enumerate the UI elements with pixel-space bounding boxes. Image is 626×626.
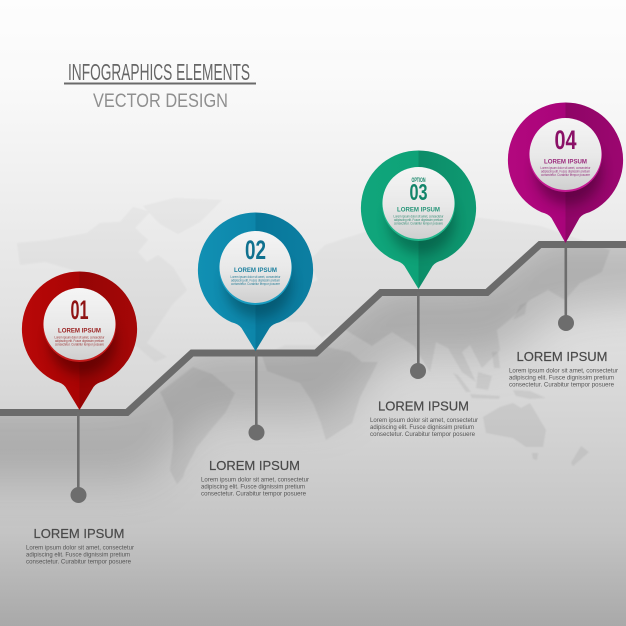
pin 04: LOREM IPSUM xyxy=(544,158,587,166)
stem and dot 02 xyxy=(248,352,264,440)
text block 03: LOREM IPSUM xyxy=(378,398,469,414)
subtitle: VECTOR DESIGN xyxy=(93,91,228,112)
pin 02: adipiscing elit. Fusce dignissim pretium xyxy=(231,278,280,282)
pin 01 xyxy=(22,271,137,410)
shadow under the rising line xyxy=(0,231,626,480)
text block 01: LOREM IPSUM xyxy=(34,526,124,541)
text block 03: consectetur. Curabitur tempor posuere xyxy=(370,431,475,438)
pin 04: 04 xyxy=(554,125,576,155)
pin 04: consectetur. Curabitur tempor posuere xyxy=(541,173,590,177)
pin 03: consectetur. Curabitur tempor posuere xyxy=(394,221,443,225)
text block 01: adipiscing elit. Fusce dignissim pretium xyxy=(26,552,130,558)
text block 02: LOREM IPSUM xyxy=(209,458,300,473)
title xyxy=(64,59,256,112)
pin 01: LOREM IPSUM xyxy=(58,328,101,334)
stem and dot 04 xyxy=(558,244,574,331)
pin 04: Lorem ipsum dolor sit amet, consectetur xyxy=(540,166,591,170)
text block 04: consectetur. Curabitur tempor posuere xyxy=(509,382,614,388)
pin 01: consectetur. Curabitur tempor posuere xyxy=(55,342,104,346)
pin 03: 03 xyxy=(410,179,428,205)
pin 02: LOREM IPSUM xyxy=(234,267,277,274)
pin 01: adipiscing elit. Fusce dignissim pretium xyxy=(55,339,104,343)
pin 03: Lorem ipsum dolor sit amet, consectetur xyxy=(394,214,444,218)
map: north america xyxy=(17,207,187,362)
text block 01: Lorem ipsum dolor sit amet, consectetur xyxy=(26,544,135,552)
pin 02 xyxy=(198,212,313,351)
pin 01: 01 xyxy=(70,295,88,325)
title: INFOGRAPHICS ELEMENTS xyxy=(68,59,250,85)
text block 04: Lorem ipsum dolor sit amet, consectetur xyxy=(509,368,619,374)
pin 03: LOREM IPSUM xyxy=(397,206,440,214)
rising line xyxy=(0,244,626,412)
pin 02: 02 xyxy=(245,235,266,265)
map: south america xyxy=(160,367,235,484)
text block 02: adipiscing elit. Fusce dignissim pretium xyxy=(201,484,305,490)
text block 02 xyxy=(201,458,310,498)
pin 03 xyxy=(361,150,476,289)
text block 02: Lorem ipsum dolor sit amet, consectetur xyxy=(201,476,310,484)
pin 02: Lorem ipsum dolor sit amet, consectetur xyxy=(230,275,281,279)
pin 03: adipiscing elit. Fusce dignissim pretium xyxy=(394,218,443,222)
map: greenland xyxy=(143,198,222,234)
map: eurasia xyxy=(286,218,610,382)
text block 03 xyxy=(370,398,479,438)
map: australia xyxy=(483,403,546,447)
text block 03: Lorem ipsum dolor sit amet, consectetur xyxy=(370,417,479,424)
pin 01: Lorem ipsum dolor sit amet, consectetur xyxy=(54,335,105,339)
text block 03: adipiscing elit. Fusce dignissim pretium xyxy=(370,424,474,431)
text block 01 xyxy=(26,526,135,566)
stem and dot 03 xyxy=(410,292,426,379)
pin 04 xyxy=(508,102,623,243)
text block 04 xyxy=(509,349,619,388)
text block 04: adipiscing elit. Fusce dignissim pretium xyxy=(509,374,614,382)
world map xyxy=(17,198,610,484)
map: africa xyxy=(262,345,378,440)
text block 02: consectetur. Curabitur tempor posuere xyxy=(201,490,306,498)
pin 02: consectetur. Curabitur tempor posuere xyxy=(231,282,280,286)
text block 01: consectetur. Curabitur tempor posuere xyxy=(26,558,131,566)
map: islands xyxy=(453,373,471,392)
text block 04: LOREM IPSUM xyxy=(516,349,608,364)
stem and dot 01 xyxy=(70,412,86,503)
pin 04: adipiscing elit. Fusce dignissim pretium xyxy=(541,169,590,173)
pin 03: OPTION xyxy=(412,178,425,184)
